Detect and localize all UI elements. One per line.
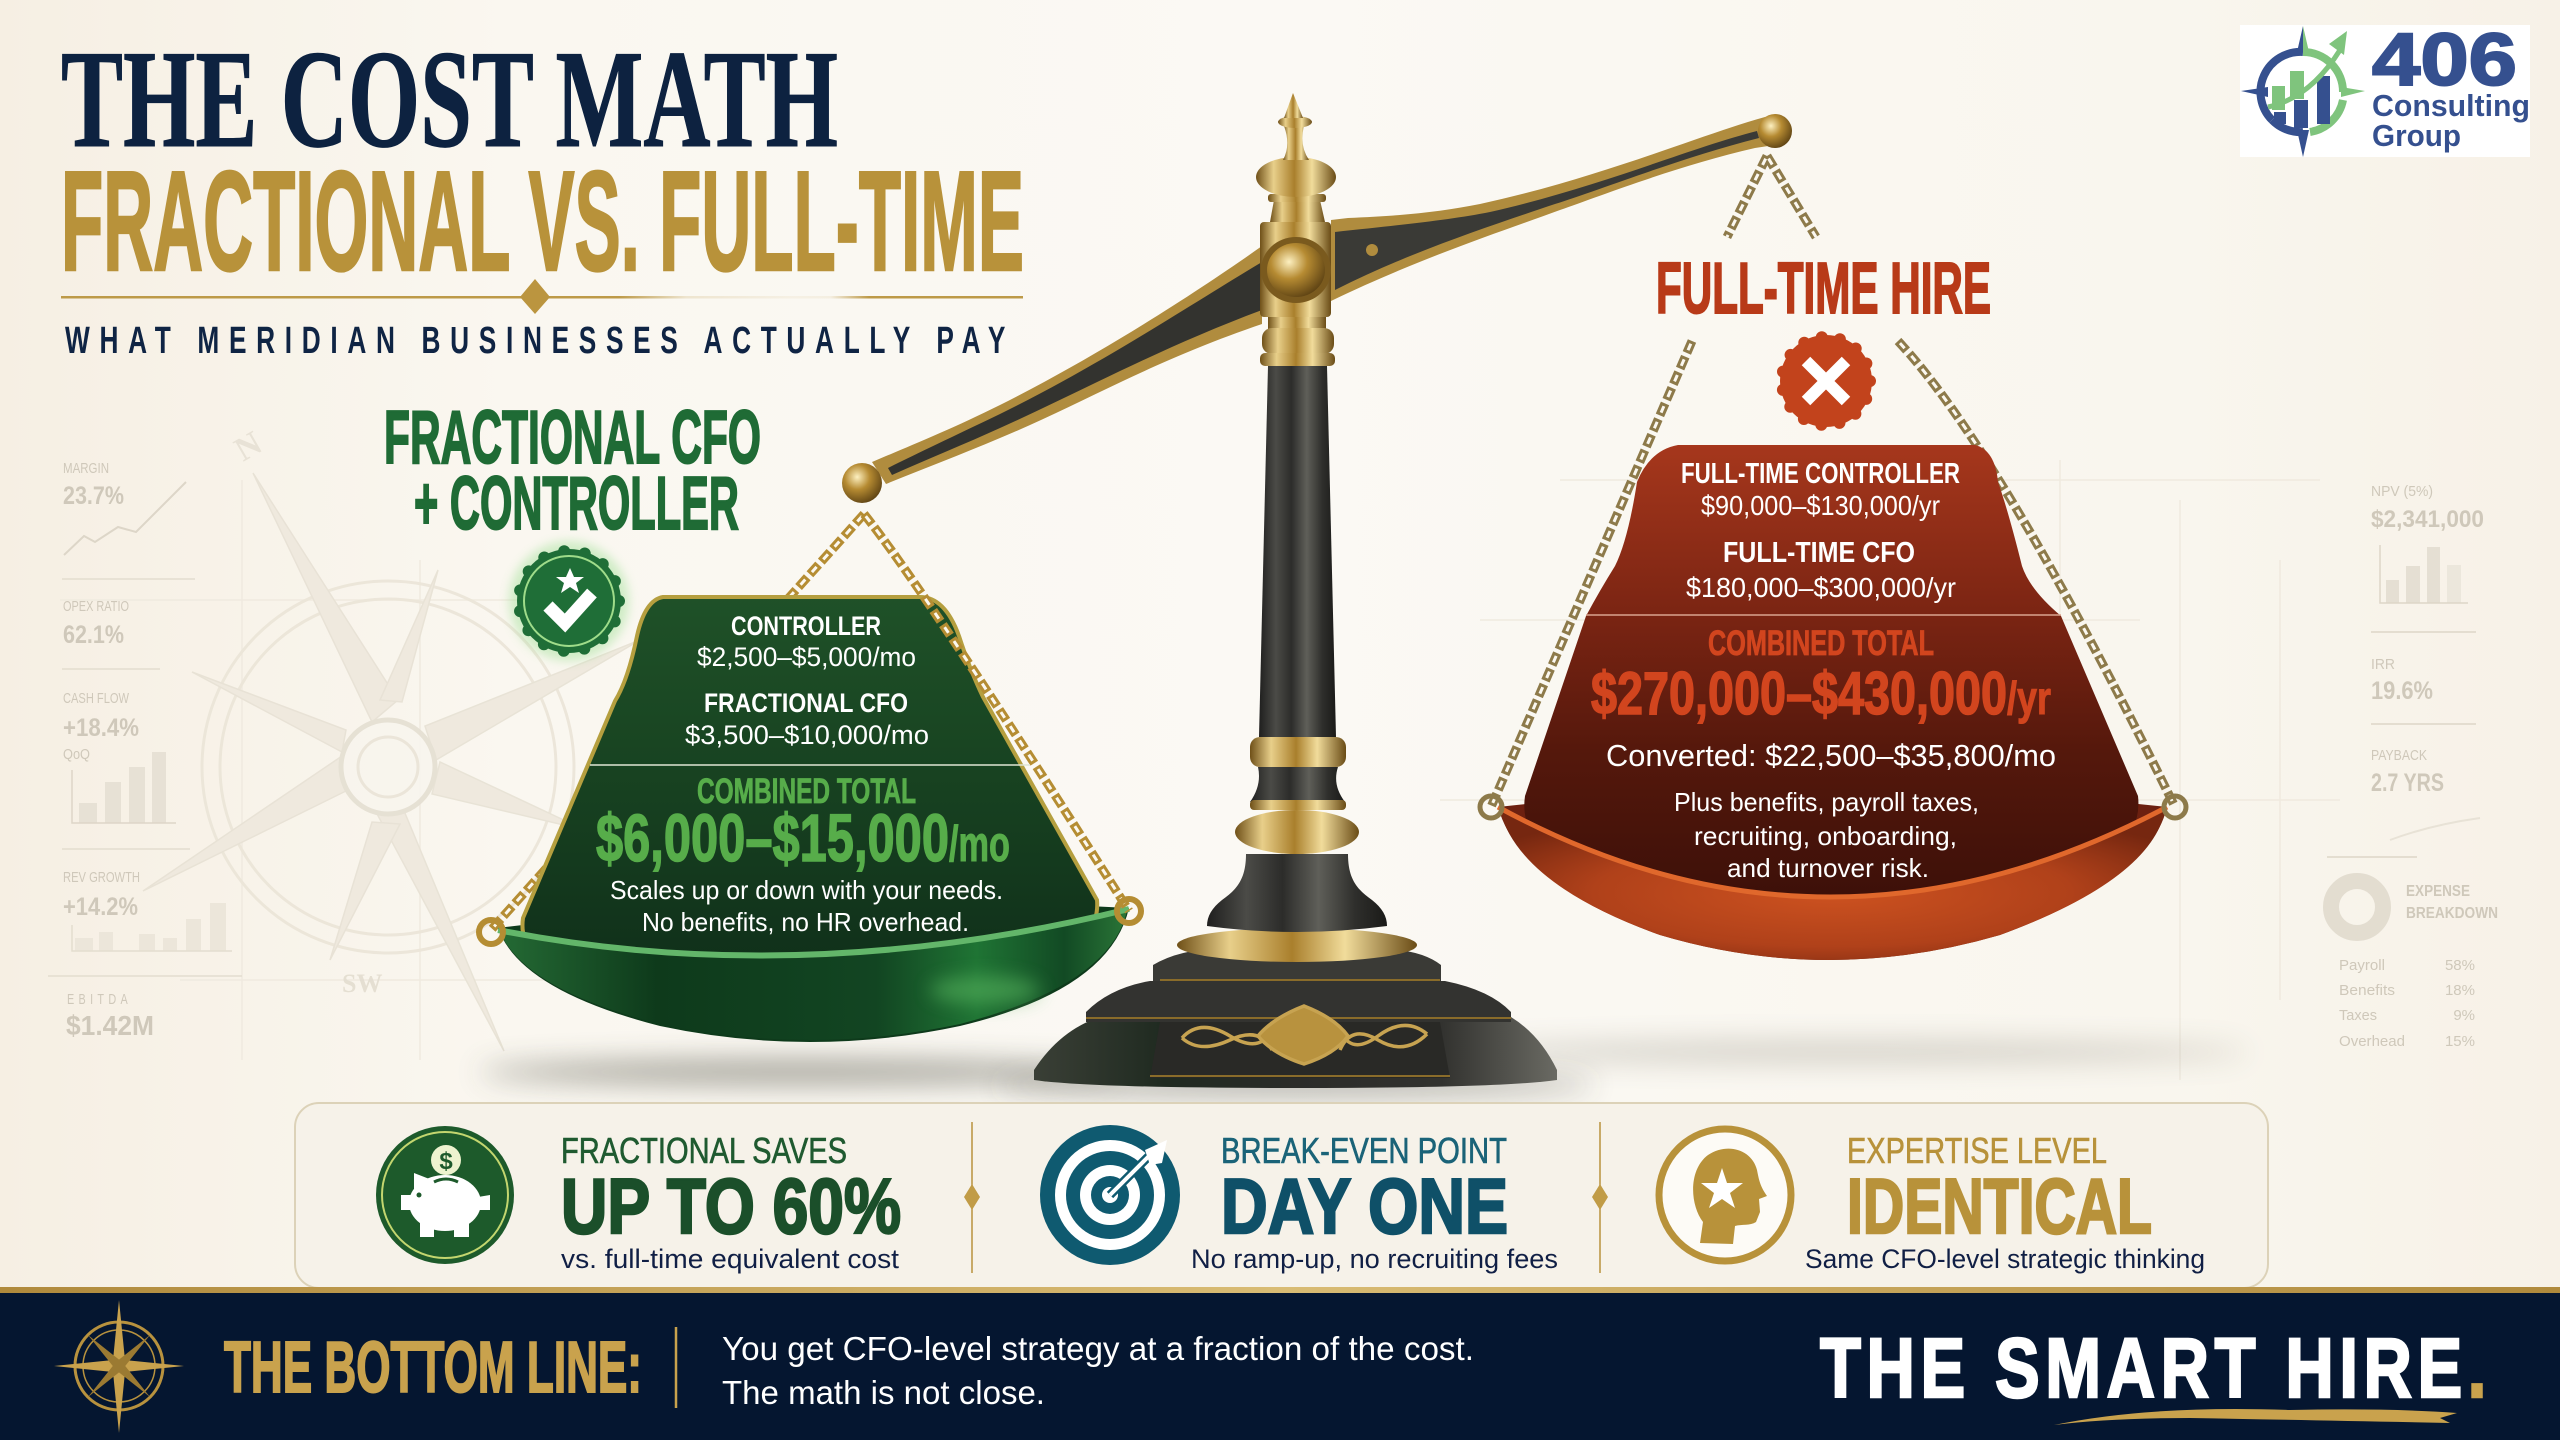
stat 2 text: BREAK-EVEN POINT <box>1221 1130 1507 1171</box>
ghost KPI column: left: 62.1% <box>63 621 124 649</box>
ghost KPI column: left: REV GROWTH <box>63 869 140 886</box>
ghost KPI column: left: 23.7% <box>63 482 124 510</box>
ghost KPI column: right: PAYBACK <box>2371 747 2427 764</box>
green bowl <box>498 902 1129 1042</box>
stat 2 text: DAY ONE <box>1221 1162 1508 1250</box>
beam right arm <box>1331 117 1775 301</box>
logo: Group <box>2372 118 2461 153</box>
ghost KPI column: right: BREAKDOWN <box>2406 905 2498 922</box>
ground shadows <box>480 1042 2250 1095</box>
ghost KPI column: left: +18.4% <box>63 714 139 742</box>
red bowl rings <box>1480 796 2186 818</box>
red chains <box>1491 156 2175 807</box>
green bowl highlight <box>930 976 1040 1004</box>
ghost KPI column: left <box>48 460 242 1041</box>
ghost KPI column: right: 18% <box>2445 982 2475 999</box>
ghost KPI column: right: 58% <box>2445 957 2475 974</box>
title <box>61 22 1024 362</box>
brush stroke <box>2054 1409 2457 1425</box>
green panel text: $6,000–$15,000 <box>596 801 949 876</box>
ghost KPI column: right: 9% <box>2453 1007 2475 1024</box>
footer message: You get CFO-level strategy at a fraction of the cost. <box>722 1330 1474 1367</box>
right end pivot <box>1758 114 1792 148</box>
logo compass mark <box>2241 26 2365 157</box>
red bowl rim <box>1498 807 2167 897</box>
ghost KPI column: left: OPEX RATIO <box>63 598 129 615</box>
red panel text: recruiting, onboarding, <box>1694 821 1957 851</box>
stat dividers <box>964 1122 1608 1273</box>
green side <box>384 395 1141 1042</box>
stat 3 text: EXPERTISE LEVEL <box>1847 1130 2107 1171</box>
panel: key stats strip <box>295 1103 2268 1288</box>
logo wordmark: 406 <box>2372 18 2517 101</box>
green heading: FRACTIONAL CFO <box>384 395 761 479</box>
beam left arm <box>872 246 1262 484</box>
stat 1 text: UP TO 60% <box>561 1162 901 1250</box>
ghost KPI column: left: EBITDA <box>67 991 132 1008</box>
red panel text: FULL-TIME CONTROLLER <box>1681 458 1960 490</box>
ghost KPI column: right: 2.7 YRS <box>2371 769 2444 797</box>
green heading <box>384 395 761 545</box>
green panel text: $2,500–$5,000/mo <box>697 642 916 672</box>
left end pivot <box>842 463 882 503</box>
ghost KPI column: right: $2,341,000 <box>2371 506 2484 533</box>
green panel text: /mo <box>949 816 1010 872</box>
red panel text: /yr <box>2007 672 2051 724</box>
green check badge <box>509 541 629 661</box>
red bowl lower body <box>1500 811 2165 960</box>
stand base <box>1034 928 1557 1088</box>
ghost compass rose: SW <box>342 969 382 998</box>
green heading: + CONTROLLER <box>414 461 739 545</box>
footer message <box>722 1330 1474 1411</box>
scale beam <box>842 93 1792 503</box>
green panel text: Scales up or down with your needs. <box>610 875 1003 905</box>
red panel <box>1524 445 2138 915</box>
icon: head with star <box>1659 1129 1791 1261</box>
green chains back <box>491 514 864 930</box>
ghost KPI column: right: Overhead <box>2339 1033 2405 1050</box>
footer message: The math is not close. <box>722 1374 1045 1411</box>
red panel text: $270,000–$430,000 <box>1591 660 2007 727</box>
ghost KPI column: left: MARGIN <box>63 460 109 477</box>
logo <box>2240 18 2530 157</box>
green panel text: COMBINED TOTAL <box>697 772 916 811</box>
red x badge <box>1780 335 1872 427</box>
stat 1 text: FRACTIONAL SAVES <box>561 1130 847 1171</box>
ghost KPI column: left: QoQ <box>63 746 90 763</box>
ghost KPI column: left: +14.2% <box>63 893 138 921</box>
stat 1 text: vs. full-time equivalent cost <box>561 1244 900 1274</box>
red panel text: Converted: $22,500–$35,800/mo <box>1606 738 2056 773</box>
red side <box>1480 156 2186 960</box>
green panel text: No benefits, no HR overhead. <box>642 907 969 937</box>
ghost KPI column: right: NPV (5%) <box>2371 483 2433 500</box>
title line 1: THE COST MATH <box>61 22 838 177</box>
stat 3 text: IDENTICAL <box>1847 1162 2152 1250</box>
footer label: THE BOTTOM LINE: <box>224 1328 642 1408</box>
icon: piggy bank: $ <box>439 1148 453 1175</box>
ghost compass rose <box>143 424 640 1051</box>
ghost KPI column: right <box>2327 483 2498 1050</box>
ghost KPI column: right: IRR <box>2371 656 2395 673</box>
stat 3 text: Same CFO-level strategic thinking <box>1805 1244 2205 1274</box>
green panel text: CONTROLLER <box>731 611 881 641</box>
text: FRACTIONAL VS. FULL-TIME <box>61 142 1024 301</box>
base ornament <box>1182 1006 1427 1064</box>
green bowl lower body <box>500 911 1127 1040</box>
ghost KPI column: right: 19.6% <box>2371 677 2433 705</box>
logo: Consulting <box>2372 88 2530 123</box>
stat 1 text <box>561 1130 901 1274</box>
ghost KPI column: right: EXPENSE <box>2406 883 2470 900</box>
red panel text: $180,000–$300,000/yr <box>1686 572 1956 603</box>
ghost KPI column: right: 15% <box>2445 1033 2475 1050</box>
ghost KPI column: left: CASH FLOW <box>63 690 130 707</box>
green panel <box>522 597 1097 965</box>
ghost KPI column: right: Taxes <box>2339 1007 2377 1024</box>
icon: footer compass <box>54 1300 184 1433</box>
green bowl rim <box>498 909 1129 956</box>
red panel text: FULL-TIME CFO <box>1723 537 1915 569</box>
background blueprint grid <box>60 460 2340 1080</box>
green panel text: FRACTIONAL CFO <box>704 688 908 718</box>
red panel text <box>1586 458 2061 883</box>
stat 2 text: No ramp-up, no recruiting fees <box>1191 1244 1558 1274</box>
red panel text: $90,000–$130,000/yr <box>1701 490 1940 521</box>
stat 2 text <box>1191 1130 1558 1274</box>
ghost KPI column: right: Payroll <box>2339 957 2385 974</box>
green panel text: $3,500–$10,000/mo <box>685 720 929 750</box>
stand column <box>1207 366 1387 932</box>
green bowl rings <box>479 899 1141 944</box>
green chain front <box>864 514 1129 911</box>
green panel text <box>590 611 1030 937</box>
red bowl <box>1498 788 2167 960</box>
red heading: FULL-TIME HIRE <box>1656 249 1991 329</box>
stat 3 text <box>1805 1130 2205 1274</box>
footer banner <box>0 1287 2560 1440</box>
title diamond <box>520 279 550 314</box>
icon: piggy bank <box>376 1126 514 1264</box>
icon: target <box>1040 1125 1180 1265</box>
subtitle: WHAT MERIDIAN BUSINESSES ACTUALLY PAY <box>65 320 1015 362</box>
ghost KPI column: left: $1.42M <box>66 1010 154 1041</box>
ghost compass rose: N <box>228 424 269 469</box>
scale stand <box>1034 317 1557 1088</box>
finial <box>1256 93 1336 222</box>
stand collar <box>1260 317 1335 366</box>
ghost KPI column: right: Benefits <box>2339 982 2395 999</box>
red panel text: and turnover risk. <box>1727 853 1929 883</box>
red panel text: Plus benefits, payroll taxes, <box>1674 787 1979 817</box>
red panel text: COMBINED TOTAL <box>1708 624 1934 663</box>
pivot block <box>1260 222 1331 317</box>
